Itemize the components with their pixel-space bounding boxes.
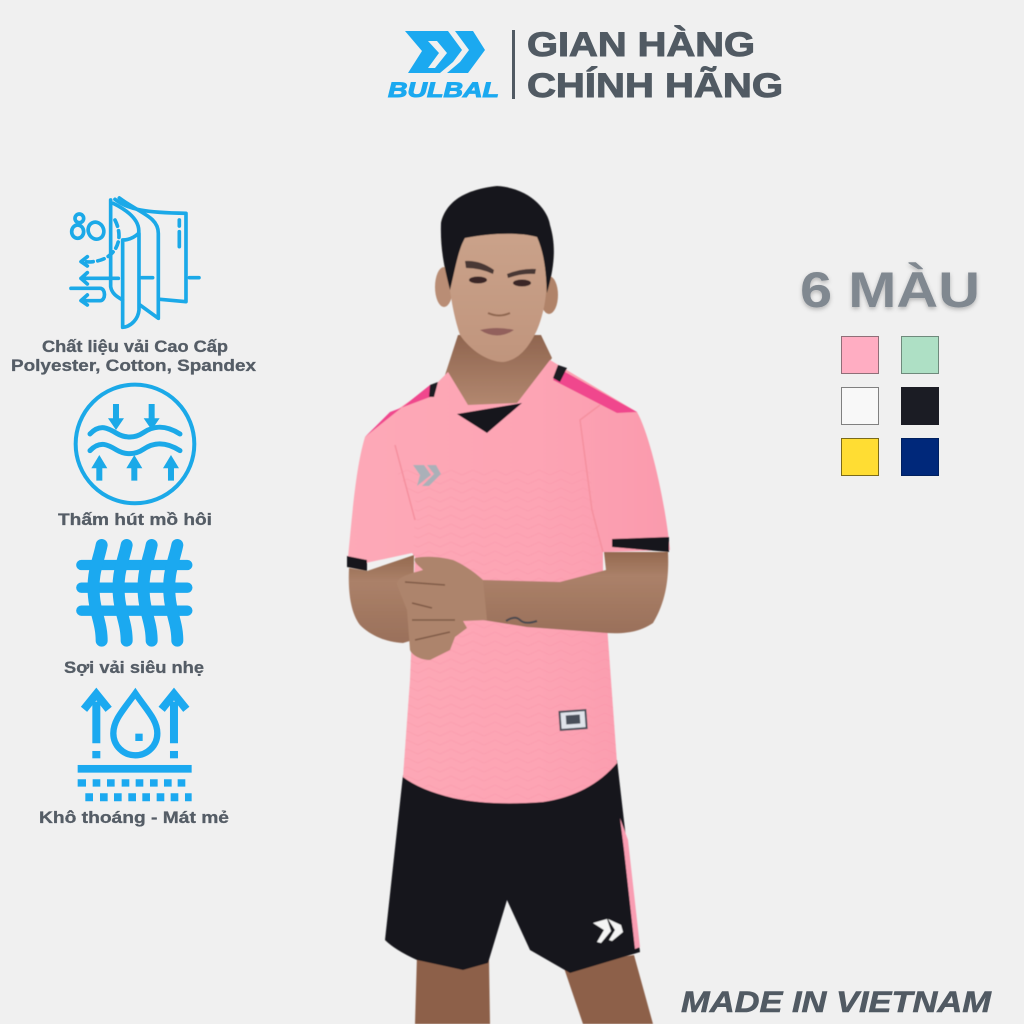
brand logo: Bulbal: BULBAL <box>388 79 499 102</box>
fingers <box>405 582 455 640</box>
facial features <box>465 261 536 336</box>
right arm <box>483 552 668 633</box>
label: sweat absorbing: Thấm hút mồ hôi <box>58 510 212 529</box>
left arm <box>349 555 414 643</box>
label: fabric material: Chất liệu vải Cao Cấp <box>42 337 228 356</box>
label: fabric material: Polyester, Cotton, Spandex <box>11 356 257 375</box>
label: light fibre: Sợi vải siêu nhẹ <box>64 658 204 677</box>
hands <box>397 557 487 660</box>
neck <box>445 335 552 410</box>
icon: fabric pages <box>71 198 199 327</box>
label: dry and cool: Khô thoáng - Mát mẻ <box>39 808 229 827</box>
heading: 6 colours: 6 MÀU <box>800 262 980 318</box>
brand logo: Bulbal <box>388 31 499 102</box>
header divider <box>512 30 515 99</box>
tattoo <box>506 618 537 623</box>
icon: light fibre mesh <box>81 545 187 641</box>
heading: official store <box>527 26 783 105</box>
icon: dry and cool <box>78 693 192 801</box>
ears <box>435 267 453 307</box>
colour swatches <box>842 336 938 476</box>
heading: official store: GIAN HÀNG <box>527 26 755 64</box>
made in vietnam tag: MADE IN VIETNAM <box>681 986 992 1019</box>
hair <box>441 186 554 293</box>
icon: sweat absorbing <box>76 385 194 503</box>
model wearing pink kit <box>347 186 670 1024</box>
heading: official store: CHÍNH HÃNG <box>527 67 783 105</box>
shorts <box>385 760 640 973</box>
label: fabric material <box>11 337 257 375</box>
face <box>450 222 547 362</box>
jersey <box>347 360 670 803</box>
legs <box>415 955 653 1024</box>
